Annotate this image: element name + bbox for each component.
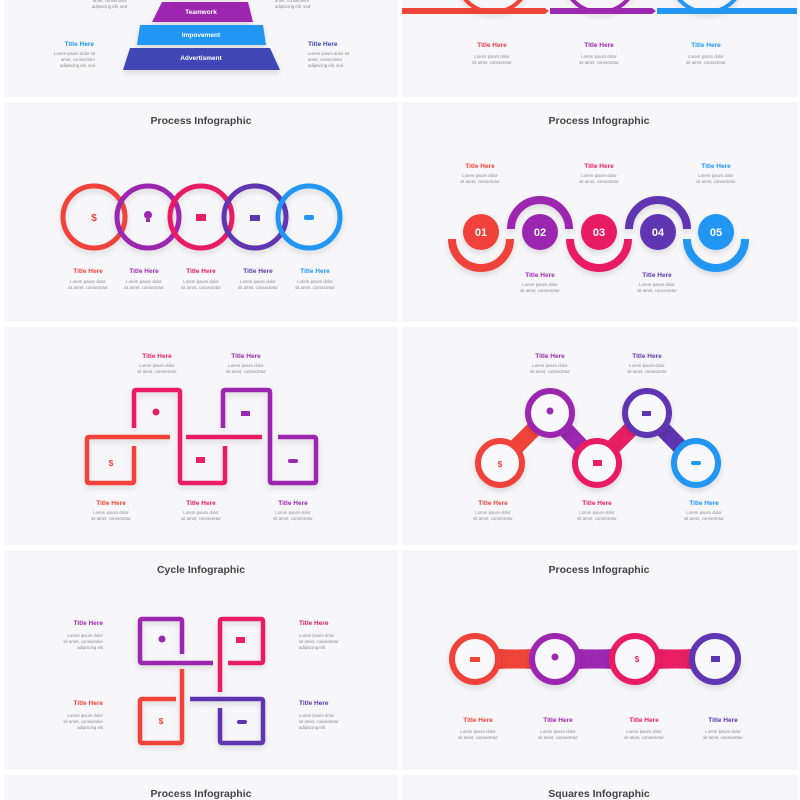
panel: numbered process: sit amet, consectetur [696,179,736,184]
panel: linked circles zigzag: sit amet, consectetur [684,516,724,521]
panel: top-right arrow line: Title Here [477,42,507,49]
heading: bottom left: Process Infographic [151,788,252,800]
panel: cycle: Title Here [299,700,329,707]
panel: process rings: Title Here [129,268,159,275]
panel: numbered process: Title Here [642,272,672,279]
panel: process rings: sit amet, consectetur [238,285,278,290]
panel: top-right arrow line: sit amet, consectetur [686,60,726,65]
panel: cycle: adipiscing elit [77,645,104,650]
panel: square path: Lorem ipsum dolor [183,510,219,515]
panel: cycle: sit amet, consectetur [299,639,339,644]
panel: cycle: Title Here [73,620,103,627]
panel: pyramid: adipiscing elit, sed [308,63,344,68]
panel: numbered process: sit amet, consectetur [520,288,560,293]
panel: linked circles row: sit amet, consectetur [538,735,578,740]
panel: square path: Title Here [231,353,261,360]
panel: linked circles row: Title Here [708,717,738,724]
panel: top-right arrow line: Title Here [584,42,614,49]
panel: process rings: Lorem ipsum dolor [297,279,333,284]
panel: numbered process [452,115,745,293]
heading: Process Infographic [549,564,650,576]
panel: linked circles row: Title Here [463,717,493,724]
panel: pyramid: Title Here [64,41,94,48]
panel: pyramid: Lorem ipsum dolor sit [54,51,96,56]
panel: linked circles zigzag: sit amet, consectetur [530,369,570,374]
panel: process rings: Title Here [300,268,330,275]
panel: numbered process: sit amet, consectetur [579,179,619,184]
panel: numbered process: 05 [710,227,722,239]
panel: pyramid: adipiscing elit, sed [60,63,96,68]
cycle icons: $ [159,717,164,726]
panel: linked circles zigzag: Lorem ipsum dolor [579,510,615,515]
panel: process rings: sit amet, consectetur [68,285,108,290]
panel: pyramid: amet, consectetur [61,57,96,62]
panel: square path: Lorem ipsum dolor [139,363,175,368]
panel: top-right arrow line: Lorem ipsum dolor [581,54,617,59]
panel: cycle: Title Here [299,620,329,627]
panel: square path: Title Here [186,500,216,507]
panel: numbered process: Title Here [465,163,495,170]
panel: linked circles row: Title Here [543,717,573,724]
panel: linked circles row: sit amet, consectetur [624,735,664,740]
panel: process rings: Lorem ipsum dolor [240,279,276,284]
panel: process rings: Title Here [73,268,103,275]
panel: linked circles zigzag: Lorem ipsum dolor [475,510,511,515]
panel: numbered process: 01 [475,227,487,239]
rings [478,391,718,485]
pyramid layers [123,0,280,70]
panel: cycle: Lorem ipsum dolor [67,713,104,718]
panel: process rings: Title Here [186,268,216,275]
panel: numbered process: Title Here [701,163,731,170]
panel: numbered process: 02 [534,227,546,239]
panel: square path: sit amet, consectetur [91,516,131,521]
panel: linked circles zigzag: sit amet, consectetur [627,369,667,374]
panel: top-right arrow line: sit amet, consectetur [579,60,619,65]
panel: linked circles zigzag: Title Here [478,500,508,507]
panel: top-right arrow line [402,0,797,65]
panel: square path: Lorem ipsum dolor [93,510,129,515]
panel: square path: Lorem ipsum dolor [275,510,311,515]
ring icons [91,211,314,224]
square icons [109,408,298,468]
panel: top-right arrow line: Title Here [691,42,721,49]
cycle icons [158,636,247,726]
panel: square path: Title Here [96,500,126,507]
panel: linked circles zigzag: Lorem ipsum dolor [629,363,665,368]
panel: process rings: Lorem ipsum dolor [126,279,162,284]
panel: pyramid: Title Here [308,41,338,48]
panel: linked circles zigzag: Title Here [535,353,565,360]
panel: cycle: Lorem ipsum dolor [299,633,335,638]
panel: cycle [63,564,339,743]
panel: square path: sit amet, consectetur [273,516,313,521]
panel: square path: Lorem ipsum dolor [228,363,264,368]
panel: pyramid: adipiscing elit, sed [92,4,128,9]
heading: Process Infographic [549,115,650,127]
panel: linked circles row: Lorem ipsum dolor [626,729,662,734]
heading: Cycle Infographic [157,564,245,576]
panel: pyramid: Lorem ipsum dolor sit [308,51,350,56]
rings [63,186,340,248]
panel: linked circles zigzag: Title Here [689,500,719,507]
panel: pyramid: Teamwork [185,9,217,16]
panel: linked circles row: Lorem ipsum dolor [540,729,576,734]
cycle squares [140,619,263,743]
rings [452,636,738,682]
panel: square path: sit amet, consectetur [181,516,221,521]
panel: numbered process: Lorem ipsum dolor [581,173,617,178]
zigzag icons [498,408,701,469]
panel: linked circles zigzag: Lorem ipsum dolor [686,510,722,515]
row icons: $ [635,655,640,664]
panel: cycle: adipiscing elit [299,725,326,730]
panel: numbered process: Lorem ipsum dolor [462,173,498,178]
panel: numbered process: Lorem ipsum dolor [698,173,734,178]
panel: cycle: adipiscing elit [299,645,326,650]
square lines [87,390,316,483]
panel: linked circles zigzag: Lorem ipsum dolor [532,363,568,368]
panel: cycle: sit amet, consectetur [299,719,339,724]
panel: cycle: Title Here [73,700,103,707]
panel: numbered process: 03 [593,227,605,239]
panel: cycle: Lorem ipsum dolor [299,713,335,718]
panel: pyramid: adipiscing elit, sed [275,4,311,9]
panel: linked circles row: Lorem ipsum dolor [460,729,496,734]
panel: numbered process: sit amet, consectetur [460,179,500,184]
panel: cycle: adipiscing elit [77,725,104,730]
heading: Process Infographic [151,115,252,127]
arcs [452,200,745,268]
panel: process rings [63,115,340,290]
panel: linked circles row: Title Here [629,717,659,724]
panel: process rings: sit amet, consectetur [295,285,335,290]
panel: linked circles row: sit amet, consectetur [703,735,743,740]
panel: process rings: sit amet, consectetur [181,285,221,290]
panel: linked circles zigzag: Title Here [582,500,612,507]
panel: cycle: Lorem ipsum dolor [67,633,104,638]
panel: square path: sit amet, consectetur [226,369,266,374]
panel: process rings: Lorem ipsum dolor [183,279,219,284]
panel: pyramid: Advertisment [180,55,223,62]
ring icons: $ [91,213,97,224]
panel: top-right arrow line: Lorem ipsum dolor [474,54,510,59]
panel: cycle: sit amet, consectetur [63,719,104,724]
panel: numbered process: Title Here [584,163,614,170]
number circles [463,214,734,250]
panel: numbered process: sit amet, consectetur [637,288,677,293]
square icons: $ [109,459,114,468]
zigzag icons: $ [498,460,503,469]
panel: numbered process: Title Here [525,272,555,279]
panel: square path: Title Here [142,353,172,360]
panel: square path [87,353,316,521]
panel: linked circles row: sit amet, consectetur [458,735,498,740]
panel: numbered process: Lorem ipsum dolor [639,282,675,287]
panel: numbered process: 04 [652,227,665,239]
connectors [500,413,696,463]
panel: linked circles zigzag: sit amet, consectetur [473,516,513,521]
panel: square path: sit amet, consectetur [137,369,177,374]
row icons [470,654,720,664]
panel: process rings: sit amet, consectetur [124,285,164,290]
panel: linked circles zigzag [473,353,724,521]
panel: linked circles row: Lorem ipsum dolor [705,729,741,734]
panel: pyramid: Impovement [182,32,221,39]
connectors [475,647,715,671]
panel: process rings: Lorem ipsum dolor [70,279,106,284]
panel: top-right arrow line: sit amet, consectetur [472,60,512,65]
panel: pyramid [54,0,350,70]
panel: process rings: Title Here [243,268,273,275]
panel: linked circles zigzag: sit amet, consectetur [577,516,617,521]
panel: top-right arrow line: Lorem ipsum dolor [688,54,724,59]
panel: square path: Title Here [278,500,308,507]
panel: numbered process: Lorem ipsum dolor [522,282,558,287]
panel: linked circles zigzag: Title Here [632,353,662,360]
panel: pyramid: amet, consectetur [308,57,343,62]
panel: linked circles row [452,564,743,740]
heading: bottom right: Squares Infographic [548,788,650,800]
panel: cycle: sit amet, consectetur [63,639,104,644]
